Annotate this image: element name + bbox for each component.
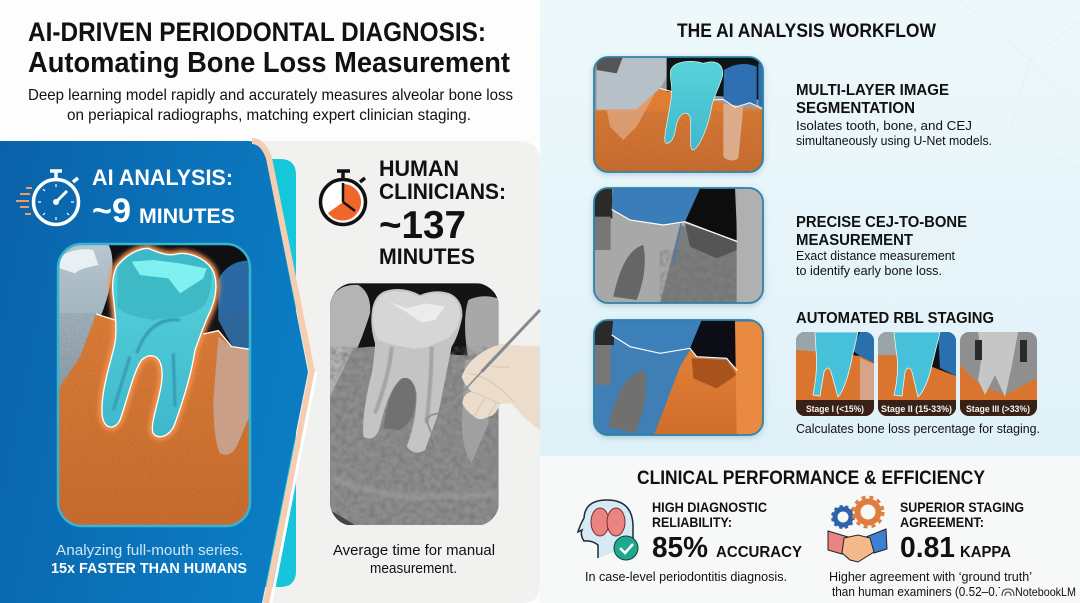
human caption: measurement. <box>370 560 457 577</box>
human caption <box>333 542 495 577</box>
metric: accuracy: HIGH DIAGNOSTIC <box>652 499 767 515</box>
human clinicians heading <box>379 156 506 269</box>
metric: kappa: than human examiners (0.52–0.72) <box>832 584 1015 599</box>
AI analysis heading <box>92 165 235 230</box>
panel: AI analysis <box>0 141 316 603</box>
stage II thumbnail: Stage II (15-33%) <box>881 404 952 414</box>
image: CEJ to bone measurement <box>594 188 763 303</box>
stage I thumbnail: Stage I (<15%) <box>806 404 864 414</box>
human clinicians heading: CLINICIANS: <box>379 179 506 204</box>
metric: accuracy <box>585 499 802 584</box>
step 2 text: Exact distance measurement <box>796 249 956 263</box>
subtitle: on periapical radiographs, matching expert clinician staging. <box>67 107 471 124</box>
step 2 text <box>796 214 967 278</box>
subtitle <box>28 87 513 124</box>
step 1 text: SEGMENTATION <box>796 100 915 117</box>
panel: human clinicians background <box>0 141 540 603</box>
NotebookLM watermark <box>1000 585 1080 603</box>
AI caption: 15x FASTER THAN HUMANS <box>51 560 247 577</box>
metric: accuracy: 85% <box>652 532 708 564</box>
metric: kappa: SUPERIOR STAGING <box>900 499 1024 515</box>
AI caption <box>51 542 247 577</box>
human radiograph <box>330 283 498 525</box>
icon: brain with check <box>578 500 638 560</box>
title <box>28 17 510 79</box>
step 2 text: MEASUREMENT <box>796 232 913 249</box>
step 1 text <box>796 82 992 148</box>
AI analysis heading: AI ANALYSIS: <box>92 165 233 190</box>
image: multi-layer segmentation <box>594 57 763 172</box>
metric: kappa: AGREEMENT: <box>900 514 984 530</box>
human clinicians heading: HUMAN <box>379 156 459 181</box>
AI segmented radiograph <box>57 240 253 530</box>
AI analysis heading: MINUTES <box>139 205 235 228</box>
step 3 caption: Calculates bone loss percentage for staging. <box>796 422 1040 436</box>
metric: accuracy: RELIABILITY: <box>652 514 732 530</box>
step 3 heading: AUTOMATED RBL STAGING <box>796 310 994 327</box>
title: Automating Bone Loss Measurement <box>28 47 510 79</box>
subtitle: Deep learning model rapidly and accurately measures alveolar bone loss <box>28 87 513 104</box>
image: segmented bone loss <box>594 320 763 435</box>
icon: AI stopwatch <box>16 171 78 224</box>
metric: kappa <box>829 499 1032 599</box>
human clinicians heading: MINUTES <box>379 244 475 269</box>
accent: cyan stripe <box>250 159 296 587</box>
icon: human clock <box>320 171 366 224</box>
step 2 text: PRECISE CEJ-TO-BONE <box>796 214 967 231</box>
icon: gears and handshake <box>828 497 887 562</box>
human caption: Average time for manual <box>333 542 495 559</box>
human clinicians heading: ~137 <box>379 204 466 247</box>
title: AI-DRIVEN PERIODONTAL DIAGNOSIS: <box>28 17 486 47</box>
stage III thumbnail: Stage III (>33%) <box>966 404 1030 414</box>
step 2 text: to identify early bone loss. <box>796 264 942 278</box>
metric: accuracy: ACCURACY <box>716 544 802 561</box>
metric: accuracy: In case-level periodontitis diagnosis. <box>585 569 787 584</box>
metric: kappa: 0.81 <box>900 532 955 564</box>
clinical performance heading: CLINICAL PERFORMANCE & EFFICIENCY <box>637 468 985 489</box>
stage II thumbnail <box>878 332 956 416</box>
metric: kappa: Higher agreement with ‘ground truth’ <box>829 569 1032 584</box>
stage I thumbnail <box>796 332 874 416</box>
AI caption: Analyzing full-mouth series. <box>56 542 243 559</box>
AI analysis heading: ~9 <box>92 192 131 230</box>
metric: kappa: KAPPA <box>960 544 1011 561</box>
step 1 text: MULTI-LAYER IMAGE <box>796 82 949 99</box>
step 1 text: simultaneously using U-Net models. <box>796 134 992 148</box>
icon: gloved hand with probe <box>426 310 540 447</box>
step 1 text: Isolates tooth, bone, and CEJ <box>796 119 972 133</box>
workflow heading: THE AI ANALYSIS WORKFLOW <box>677 20 937 42</box>
stage III thumbnail <box>960 332 1037 416</box>
